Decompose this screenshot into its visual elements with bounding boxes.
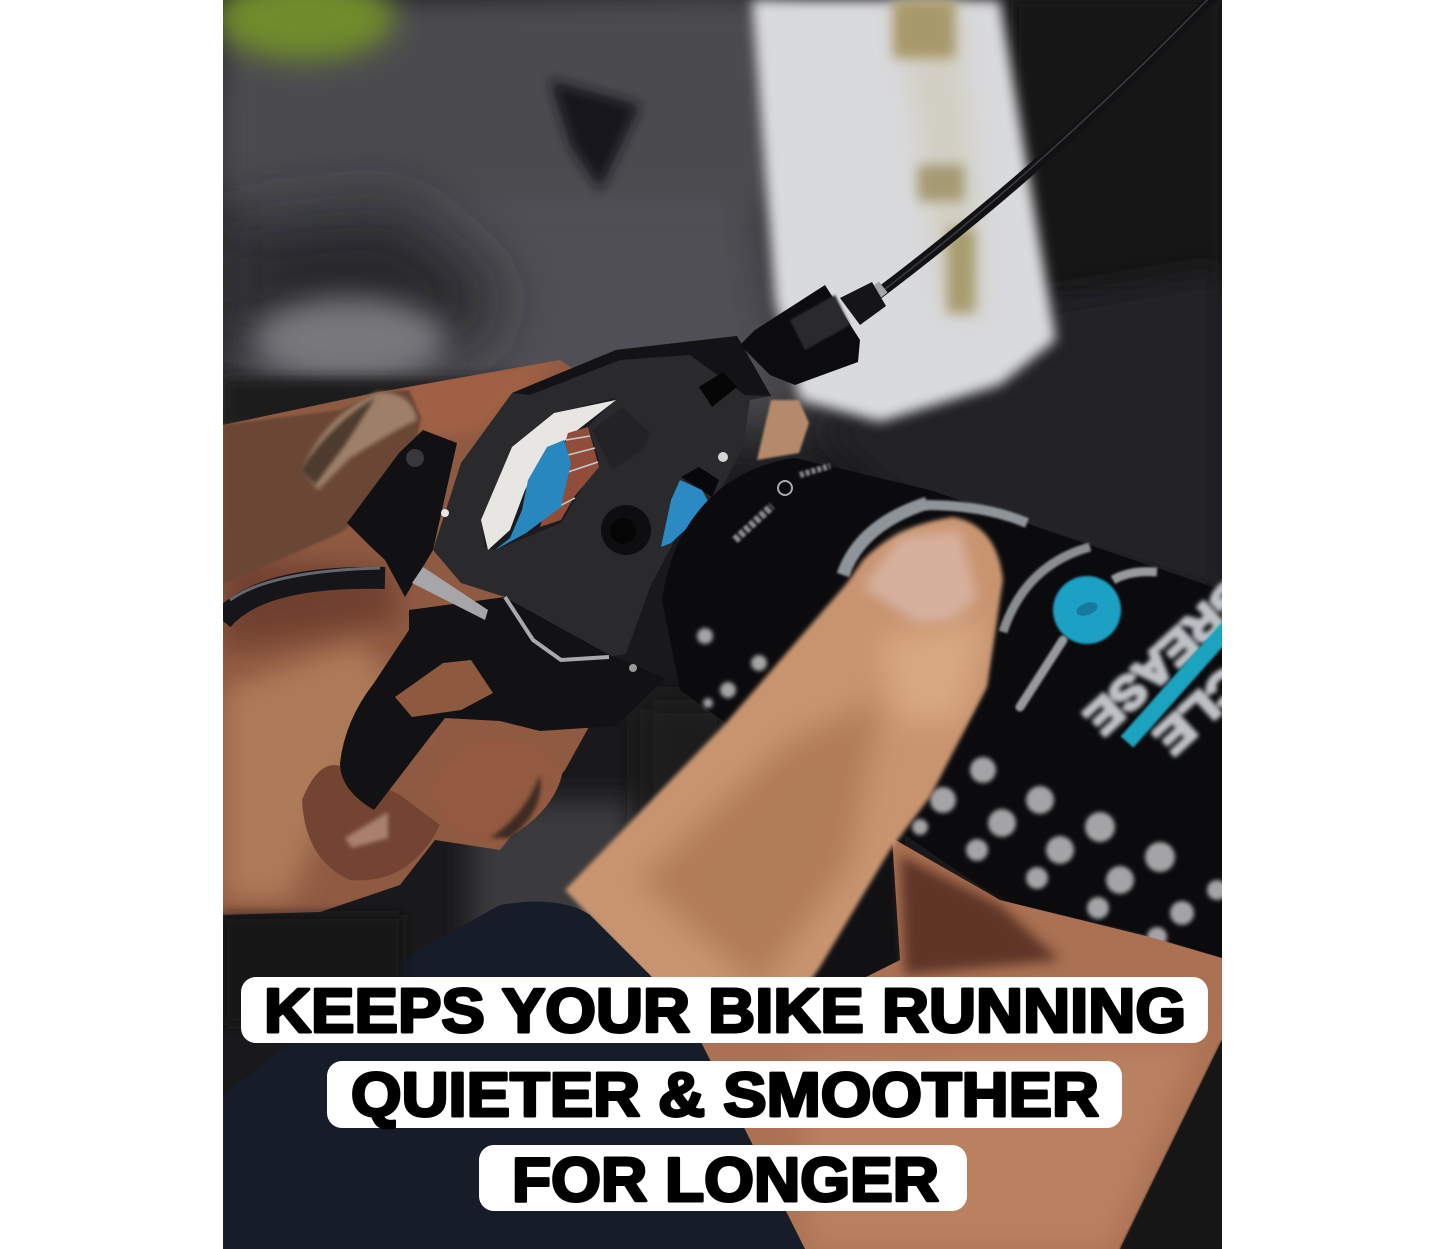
- left hand: [223, 360, 809, 915]
- tube label lettering: CYCLE: [1145, 605, 1312, 765]
- thumbnail: [863, 530, 977, 623]
- right hand palm and dark gap: [700, 835, 1222, 1249]
- shifter clamp: [347, 430, 457, 597]
- tube label lettering: GREASE: [1075, 567, 1262, 745]
- dark tab: [592, 407, 650, 470]
- tube label lettering: [1078, 578, 1222, 760]
- dark sleeve: [223, 902, 805, 1249]
- shifter lever: [340, 597, 665, 810]
- caption line 2: QUIETER & SMOOTHER: [351, 1061, 1099, 1130]
- thumb: [565, 517, 1003, 1010]
- photo: bike shifter being greased: [215, 0, 1312, 1249]
- silver grease edges: [412, 567, 488, 620]
- index finger: [223, 390, 421, 585]
- blurred workshop background: [215, 0, 1222, 1249]
- caption line 3: FOR LONGER: [512, 1146, 939, 1215]
- blue grease in mechanism: [495, 440, 571, 550]
- finger under lever: [512, 773, 562, 836]
- infographic photo panel with caption: [223, 0, 1222, 1249]
- tube snowflake pattern: [697, 628, 1227, 947]
- lower blue grease: [681, 467, 719, 497]
- brake hose: [222, 568, 385, 620]
- fingertip behind shifter: [757, 400, 809, 460]
- shifter barrel adjuster: [740, 285, 860, 385]
- gear cable: [840, 0, 1215, 325]
- tube logo: [1053, 576, 1121, 644]
- tube teal stripe: [1127, 620, 1235, 742]
- tube label arcs: [843, 503, 927, 575]
- white bike frame tube with gold lettering: [752, 0, 1056, 422]
- shifter body: [412, 285, 860, 672]
- exposed mechanism window: [481, 398, 616, 550]
- tube small print: [735, 506, 772, 540]
- grease tube: [662, 458, 1222, 958]
- vent slot: [699, 372, 737, 407]
- caption line 1: KEEPS YOUR BIKE RUNNING: [264, 977, 1186, 1046]
- screw: [601, 505, 651, 555]
